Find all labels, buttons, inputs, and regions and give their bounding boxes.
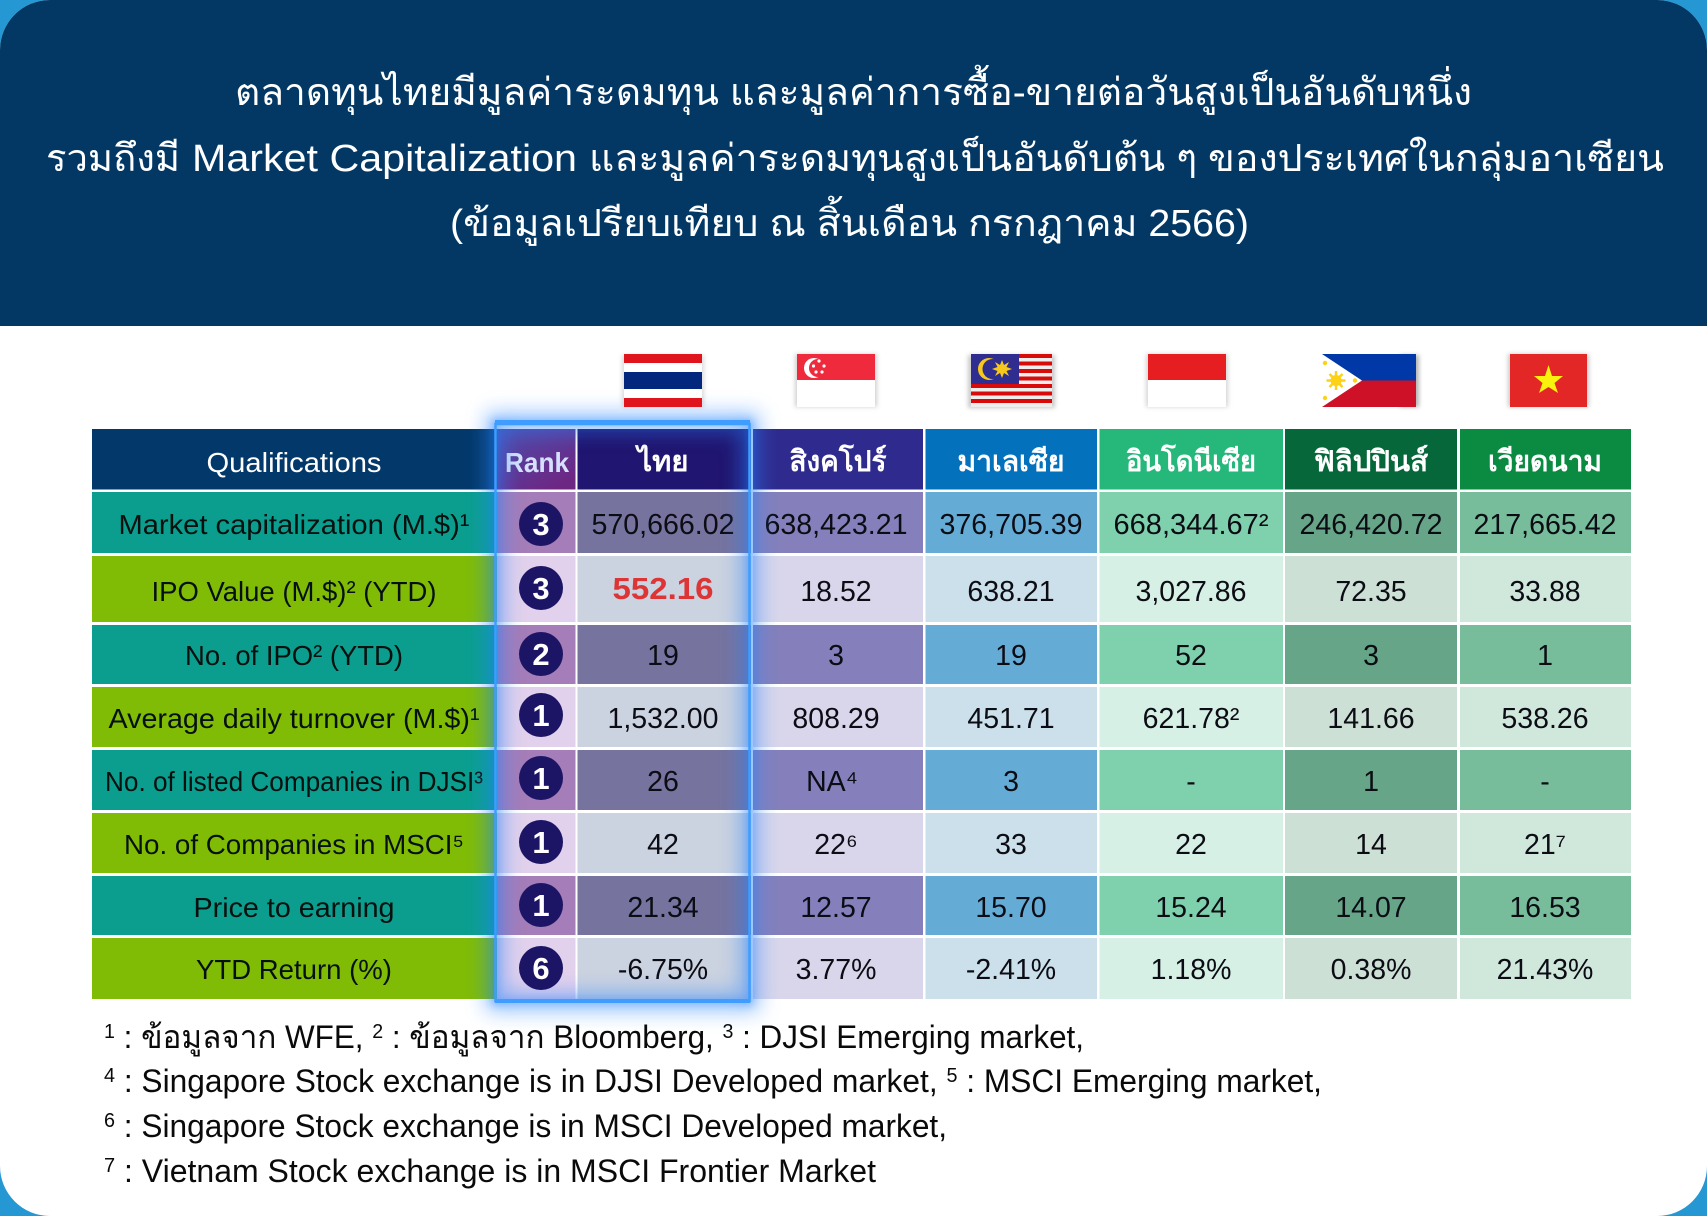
row: Market capitalization: 668,344.67²	[1114, 509, 1268, 541]
rank badge: IPO value: 3	[532, 571, 550, 606]
title line 3: (ข้อมูลเปรียบเทียบ ณ สิ้นเดือน กรกฎาคม 2566)	[450, 195, 1249, 246]
row: IPO Value: 638.21	[967, 576, 1055, 608]
footnotes	[104, 1019, 1322, 1189]
rank badge: price to earning: 1	[532, 888, 550, 923]
row: IPO Value: 3,027.86	[1136, 576, 1246, 608]
row: Market capitalization	[92, 492, 1631, 553]
rank badge: market capitalization	[519, 502, 563, 546]
header cell: Rank: Rank	[505, 447, 569, 478]
rank badge: number of IPO: 2	[532, 637, 550, 672]
row: Price to earning: Price to earning	[194, 892, 394, 923]
row: YTD Return: -2.41%	[966, 954, 1056, 986]
row: No. of IPO: 19	[995, 640, 1027, 672]
row: Average daily turnover: Average daily turnover (M.$)¹	[108, 703, 480, 734]
rank badge: MSCI: 1	[532, 825, 550, 860]
row: Average daily turnover: 538.26	[1501, 703, 1589, 735]
row: Companies in MSCI: No. of Companies in MSCI⁵	[124, 829, 464, 860]
row: IPO Value: 18.52	[800, 576, 872, 608]
row: Companies in MSCI: 21⁷	[1524, 829, 1566, 861]
flags row	[622, 354, 1589, 408]
header cell: Rank	[497, 429, 576, 490]
row: Price to earning: 12.57	[800, 892, 872, 924]
row: YTD Return: -6.75%	[618, 954, 708, 986]
row: Listed companies in DJSI: No. of listed Companies in DJSI³	[105, 766, 483, 797]
row: YTD Return: 0.38%	[1331, 954, 1411, 986]
row: Listed companies in DJSI: 1	[1363, 766, 1379, 798]
header cell: Singapore: สิงคโปร์	[790, 443, 887, 478]
row: YTD Return: YTD Return (%)	[196, 954, 392, 985]
title line 2: Market Capitalization	[192, 138, 577, 180]
row: IPO Value	[92, 556, 1631, 622]
row: Average daily turnover: 451.71	[967, 703, 1055, 735]
row: Companies in MSCI: 42	[647, 829, 679, 861]
row: No. of IPO: 3	[1363, 640, 1379, 672]
row: YTD Return: 3.77%	[796, 954, 876, 986]
footnote line 1: 2	[372, 1021, 383, 1043]
row: Market capitalization: 638,423.21	[764, 509, 908, 541]
rank badge: IPO value	[519, 566, 563, 610]
row: Listed companies in DJSI: 26	[647, 766, 679, 798]
footnote line 1: : ข้อมูลจาก WFE,	[115, 1019, 372, 1057]
rank badge: average daily turnover: 1	[532, 698, 550, 733]
rank badge: average daily turnover	[519, 693, 563, 737]
row: Companies in MSCI: 22⁶	[814, 829, 858, 861]
row: No. of IPO: 52	[1175, 640, 1207, 672]
rank badge: DJSI	[519, 756, 563, 800]
row: Average daily turnover: 621.78²	[1143, 703, 1239, 735]
row: Companies in MSCI: 22	[1175, 829, 1207, 861]
row: No. of IPO: 3	[828, 640, 844, 672]
rank badge: number of IPO	[519, 632, 563, 676]
row: Companies in MSCI	[92, 813, 1631, 873]
row: Price to earning: 15.70	[975, 892, 1047, 924]
row: Price to earning: 16.53	[1509, 892, 1581, 924]
header cell: Indonesia	[1100, 429, 1283, 490]
row: Market capitalization: Market capitalization (M.$)¹	[118, 509, 470, 540]
title line 1: ตลาดทุนไทยมีมูลค่าระดมทุน และมูลค่าการซื้อ-ขายต่อวันสูงเป็นอันดับหนึ่ง	[235, 64, 1472, 115]
flag: Thailand	[622, 354, 704, 407]
row: Average daily turnover: 808.29	[792, 703, 880, 735]
highlight frame around Thailand column	[495, 420, 750, 1003]
header cell: Philippines: ฟิลิปปินส์	[1314, 444, 1428, 478]
rank badge: YTD return	[519, 946, 563, 990]
flag: Malaysia	[968, 354, 1055, 408]
row: Price to earning: 21.34	[627, 892, 699, 924]
flag: Philippines	[1322, 354, 1419, 407]
footnote line 1: 1	[104, 1021, 115, 1043]
header row	[92, 429, 1631, 490]
row: Listed companies in DJSI: NA⁴	[806, 766, 858, 798]
flag: Vietnam	[1508, 354, 1589, 407]
header banner	[0, 0, 1707, 326]
row: No. of IPO: 19	[647, 640, 679, 672]
footnote line 2: 5	[946, 1065, 957, 1087]
footnote line 4: 7	[104, 1155, 115, 1177]
row: IPO Value: 72.35	[1335, 576, 1407, 608]
row: Price to earning: 14.07	[1335, 892, 1407, 924]
row: Listed companies in DJSI: -	[1540, 766, 1550, 798]
footnote line 4: : Vietnam Stock exchange is in MSCI Frontier Market	[115, 1153, 876, 1189]
footnote line 1: : ข้อมูลจาก Bloomberg,	[383, 1019, 722, 1057]
header cell: Malaysia: มาเลเซีย	[958, 446, 1064, 478]
row: YTD Return	[92, 938, 1631, 999]
header cell: Singapore	[753, 429, 923, 490]
rank badge: YTD return: 6	[532, 951, 550, 986]
title line 2: และมูลค่าระดมทุนสูงเป็นอันดับต้น ๆ ของประเทศในกลุ่มอาเซียน	[589, 135, 1664, 181]
rank badge: DJSI: 1	[532, 761, 550, 796]
row: IPO Value: 33.88	[1509, 576, 1581, 608]
row: Companies in MSCI: 14	[1355, 829, 1387, 861]
row: Listed companies in DJSI	[92, 750, 1631, 810]
row: Average daily turnover: 1,532.00	[608, 703, 718, 735]
comparison table	[92, 429, 1631, 999]
row: No. of IPO: 1	[1537, 640, 1553, 672]
flag: Singapore	[795, 354, 877, 407]
header cell: Philippines	[1285, 429, 1457, 490]
rank badge: market capitalization: 3	[532, 507, 550, 542]
footnote line 2: 4	[104, 1065, 115, 1087]
row: Listed companies in DJSI: -	[1186, 766, 1196, 798]
row: Market capitalization: 217,665.42	[1474, 509, 1616, 541]
row: No. of IPO: No. of IPO² (YTD)	[185, 640, 403, 671]
flag: Indonesia	[1146, 354, 1228, 407]
rank badge: MSCI	[519, 820, 563, 864]
header cell: Qualifications	[92, 429, 497, 490]
header cell: Indonesia: อินโดนีเซีย	[1126, 443, 1256, 478]
row: IPO Value: 552.16	[612, 571, 714, 606]
header cell: Vietnam: เวียดนาม	[1488, 446, 1602, 478]
title line 2	[46, 135, 1664, 181]
footnote line 1: : DJSI Emerging market,	[733, 1019, 1084, 1055]
header cell: Thailand: ไทย	[634, 444, 688, 478]
rank badge: price to earning	[519, 883, 563, 927]
footnote line 3: : Singapore Stock exchange is in MSCI Developed market,	[115, 1108, 947, 1144]
row: Price to earning	[92, 876, 1631, 935]
row: Average daily turnover	[92, 687, 1631, 747]
row: Companies in MSCI: 33	[995, 829, 1027, 861]
row: Listed companies in DJSI: 3	[1003, 766, 1019, 798]
header cell: Qualifications: Qualifications	[206, 447, 382, 478]
row: YTD Return: 1.18%	[1151, 954, 1231, 986]
row: No. of IPO	[92, 625, 1631, 684]
header cell: Thailand	[578, 429, 751, 490]
row: Price to earning: 15.24	[1155, 892, 1227, 924]
header cell: Malaysia	[926, 429, 1097, 490]
footnote line 1: 3	[722, 1021, 733, 1043]
row: IPO Value: IPO Value (M.$)² (YTD)	[152, 576, 436, 607]
row: Market capitalization: 570,666.02	[592, 509, 734, 541]
row: Market capitalization: 246,420.72	[1300, 509, 1442, 541]
footnote line 2: : MSCI Emerging market,	[957, 1063, 1322, 1099]
title line 2: รวมถึงมี	[46, 138, 180, 180]
rank badges	[519, 502, 563, 990]
row: YTD Return: 21.43%	[1497, 954, 1593, 986]
header cell: Vietnam	[1460, 429, 1631, 490]
footnote line 3: 6	[104, 1110, 115, 1132]
row: Average daily turnover: 141.66	[1327, 703, 1415, 735]
footnote line 2: : Singapore Stock exchange is in DJSI Developed market,	[115, 1063, 946, 1099]
row: Market capitalization: 376,705.39	[940, 509, 1082, 541]
